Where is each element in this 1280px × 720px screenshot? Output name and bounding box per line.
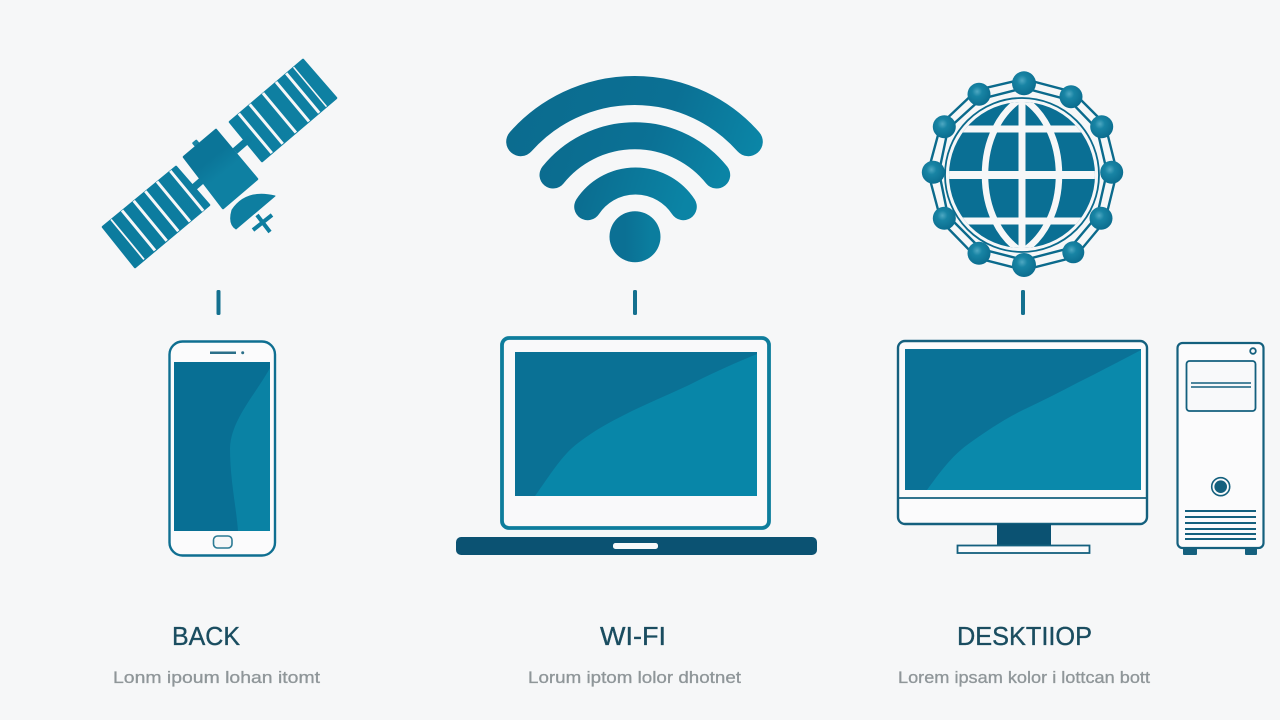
connector: wi-fi to laptop (633, 290, 637, 315)
icon: laptop (456, 338, 817, 555)
globe link ring (928, 79, 1117, 270)
globe sphere with grid (949, 102, 1095, 248)
satellite left solar panel (103, 167, 209, 267)
caption: wi-fi: Lorum iptom lolor dhotnet (528, 669, 741, 687)
infographic canvas (102, 58, 1265, 687)
satellite body (184, 130, 257, 208)
laptop screen (502, 338, 769, 528)
icon: network globe (922, 71, 1123, 277)
connector: satellite to phone (216, 290, 220, 315)
icon: satellite (103, 60, 336, 267)
heading: desktop: DESKTIIOP (957, 621, 1092, 651)
caption: back: Lonm ipoum lohan itomt (113, 669, 320, 687)
caption: desktop: Lorem ipsam kolor i lottcan bott (898, 669, 1150, 687)
heading: back: BACK (172, 621, 241, 651)
laptop base (456, 537, 817, 555)
heading: wi-fi: WI-FI (600, 621, 666, 651)
icon: desktop monitor (898, 341, 1147, 553)
satellite dish (231, 194, 275, 232)
globe network nodes (922, 71, 1123, 277)
satellite right solar panel (230, 60, 336, 161)
connector: globe to desktop (1021, 290, 1025, 315)
icon: wi-fi signal (521, 90, 748, 262)
icon: desktop tower (1178, 343, 1264, 555)
icon: smartphone (170, 342, 275, 556)
